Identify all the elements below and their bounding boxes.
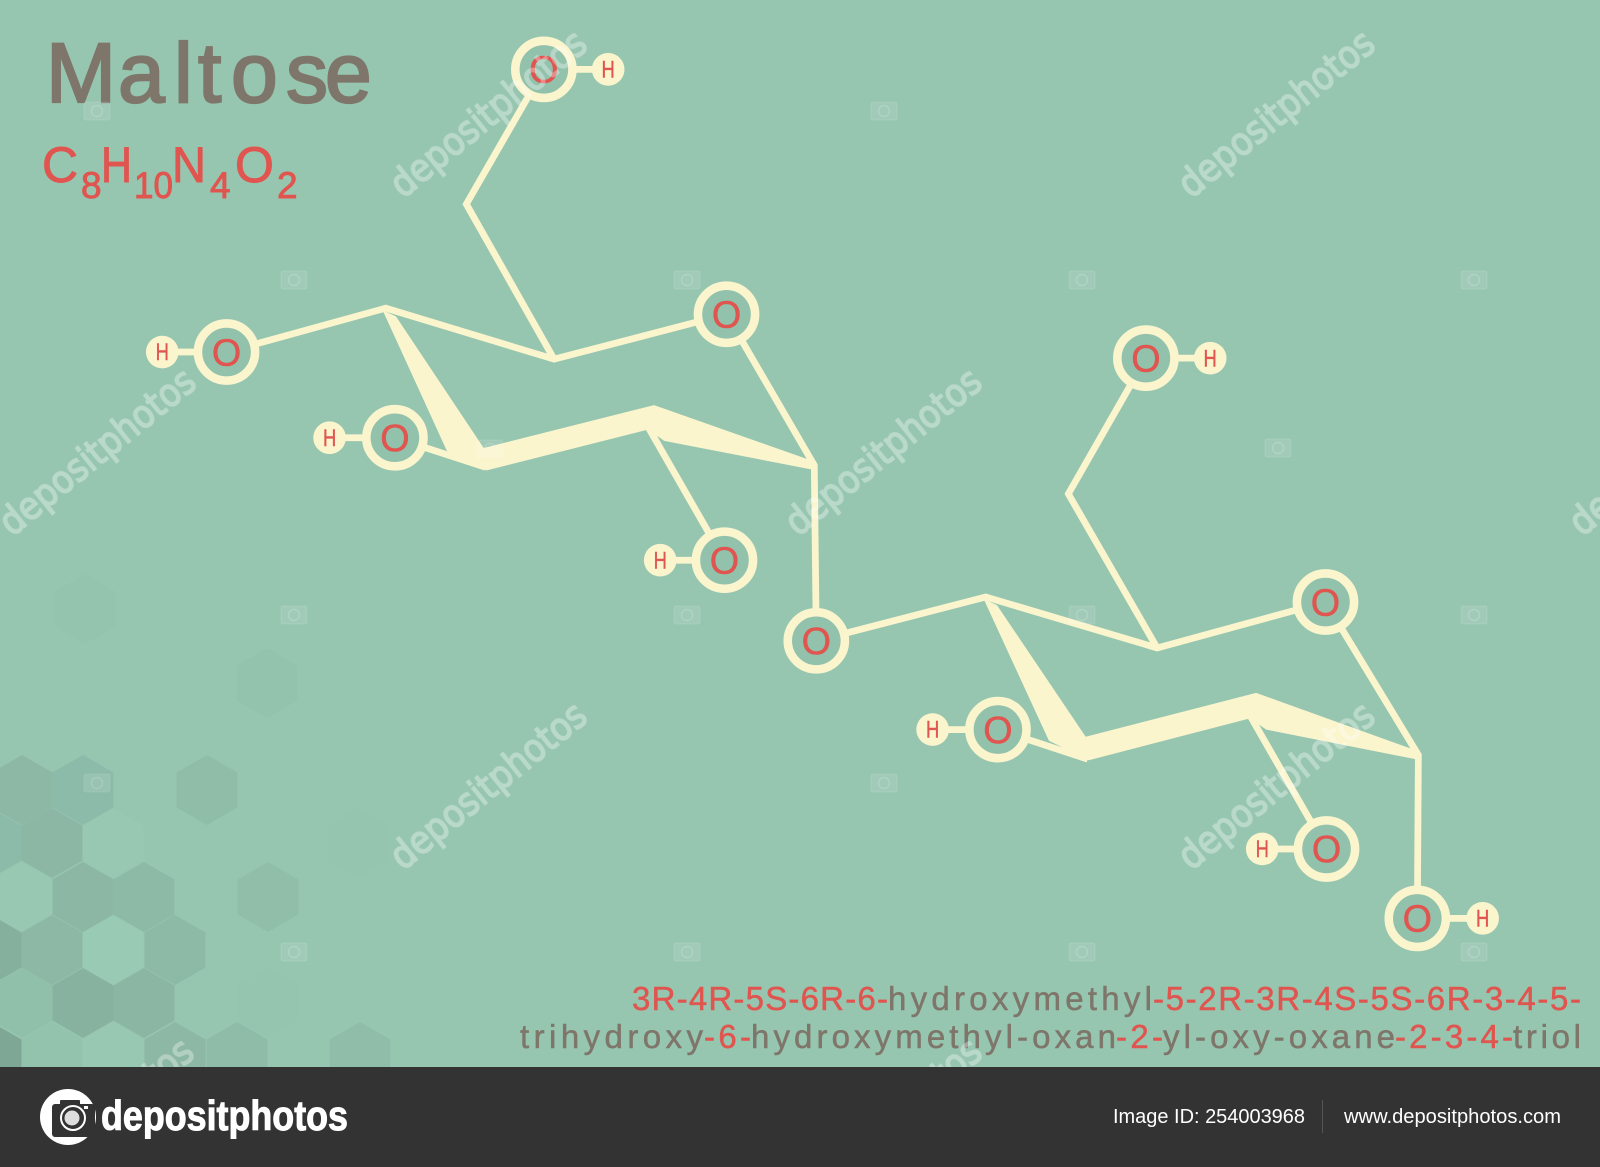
IUPAC name: hydroxymethyl-oxan <box>751 1018 1116 1055</box>
oxygen labels <box>212 49 1432 940</box>
IUPAC name <box>520 980 1581 1055</box>
icon: camera logo <box>40 1089 96 1145</box>
chemical formula: 10 <box>134 165 173 206</box>
hydrogen labels: H <box>926 717 939 744</box>
hydrogen labels: H <box>602 57 615 84</box>
IUPAC name: 3R-4R-5S-6R-6- <box>632 980 888 1017</box>
IUPAC name: -6- <box>704 1018 751 1055</box>
chemical formula: 4 <box>210 165 231 206</box>
hydrogen labels: H <box>1476 906 1489 933</box>
chemical formula: H <box>101 137 132 193</box>
oxygen labels: O <box>1312 828 1341 870</box>
watermarks: depositphotos <box>381 693 595 878</box>
hydrogen labels: H <box>323 425 336 452</box>
second ring wedge <box>984 599 1420 760</box>
hydrogen labels: H <box>1204 345 1217 372</box>
IUPAC name: -2- <box>1116 1018 1163 1055</box>
IUPAC name: triol <box>1513 1018 1581 1055</box>
chemical formula: 2 <box>277 165 298 206</box>
oxygen atoms <box>198 41 1446 947</box>
hydrogen labels: H <box>156 339 169 366</box>
oxygen labels: O <box>212 331 241 373</box>
chemical formula: N <box>172 137 206 193</box>
IUPAC name: -5-2R-3R-4S-5S-6R-3-4-5- <box>1153 980 1581 1017</box>
IUPAC name: -2-3-4- <box>1395 1018 1513 1055</box>
watermarks: depositphotos <box>776 359 990 544</box>
title: Maltose <box>46 26 372 120</box>
oxygen labels: O <box>1311 581 1340 623</box>
hydrogen labels <box>156 57 1489 933</box>
footer band <box>0 1067 1600 1167</box>
IUPAC name: yl-oxy-oxane <box>1163 1018 1395 1055</box>
oxygen labels: O <box>712 294 741 336</box>
IUPAC name: trihydroxy <box>520 1018 704 1055</box>
first ring wedge <box>383 310 816 470</box>
logo wordmark: depositphotos <box>101 1092 348 1139</box>
watermarks: depositphotos <box>1169 693 1383 878</box>
hydrogen atoms <box>146 53 1499 935</box>
hydrogen labels: H <box>654 547 667 574</box>
watermarks: depositphotos <box>1169 21 1383 206</box>
chemical formula <box>42 137 298 206</box>
watermarks: depositphotos <box>381 21 595 206</box>
oxygen labels: O <box>802 620 831 662</box>
molecule structure <box>146 41 1499 947</box>
hydrogen labels: H <box>1256 836 1269 863</box>
chemical formula: O <box>235 137 274 193</box>
chemical formula: 8 <box>81 165 102 206</box>
oxygen labels: O <box>983 709 1013 751</box>
watermark camera icons <box>84 102 1487 961</box>
IUPAC name: hydroxymethyl <box>888 980 1152 1017</box>
hexagon pattern <box>0 574 390 1092</box>
oxygen labels: O <box>1403 898 1432 940</box>
chemical formula: C <box>42 137 78 193</box>
bonds <box>162 69 1483 918</box>
oxygen labels: O <box>710 539 739 581</box>
oxygen labels: O <box>380 417 410 459</box>
oxygen labels: O <box>1131 337 1161 379</box>
image id: Image ID: 254003968 <box>1113 1106 1305 1128</box>
oxygen labels: O <box>529 49 559 91</box>
website: www.depositphotos.com <box>1343 1106 1561 1128</box>
